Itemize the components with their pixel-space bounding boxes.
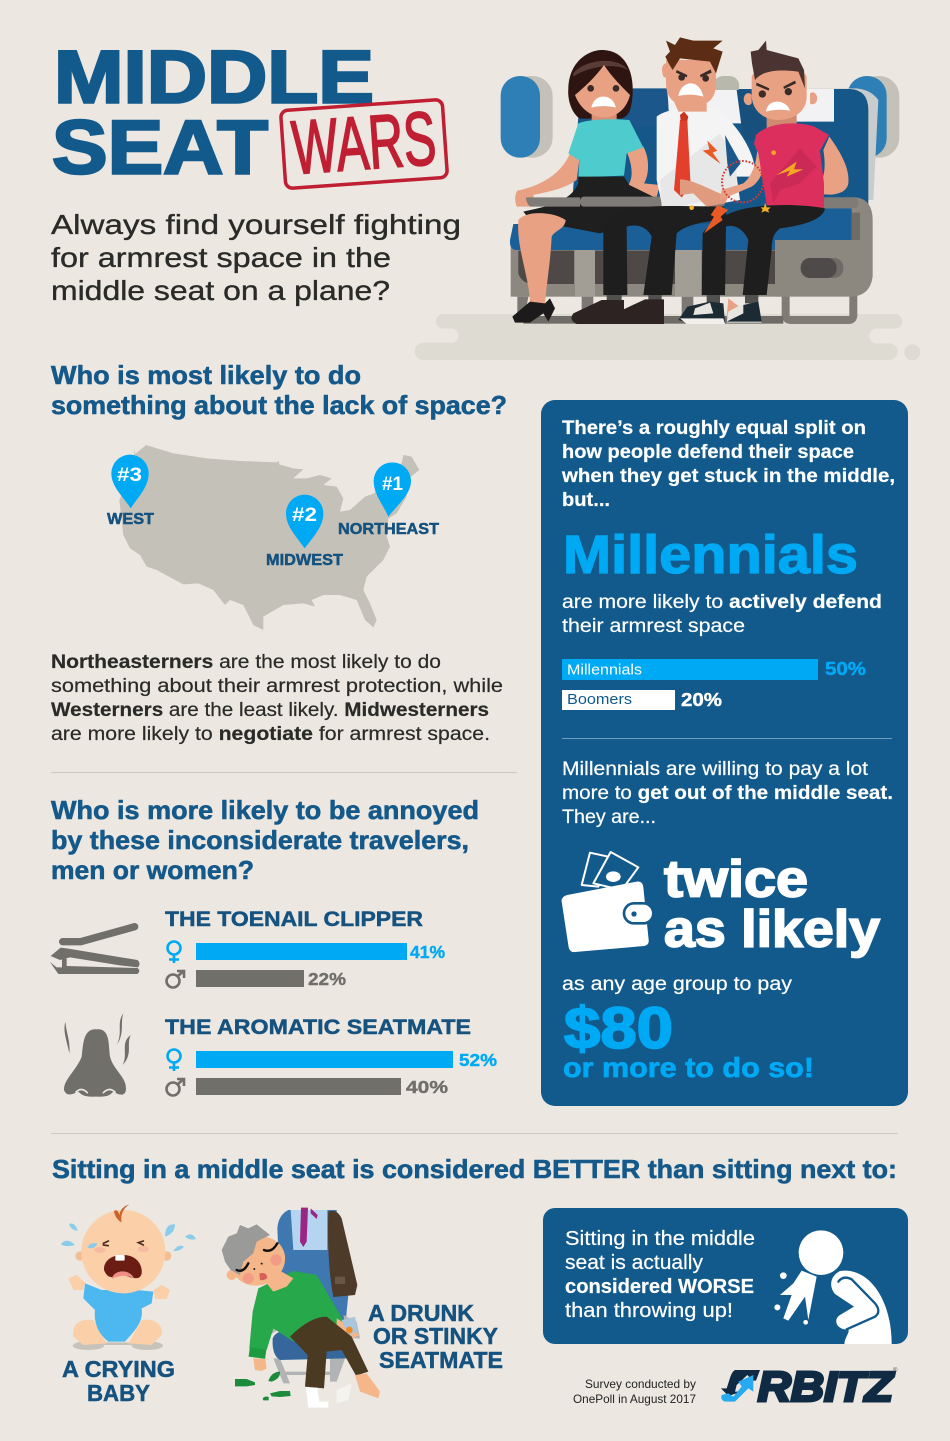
panel intro text: when they get stuck in the middle, [561, 466, 895, 487]
label: drunk or stinky seatmate: OR STINKY [373, 1323, 498, 1349]
paragraph: regional findings: Northeasterners are the most likely to do [51, 652, 441, 673]
stamp: wars [280, 95, 448, 192]
panel intro text [561, 418, 895, 511]
$80: $80 [564, 996, 673, 1061]
bar: boomers 20% [562, 690, 722, 710]
bar: millennials 50% [562, 659, 866, 680]
heading: annoyed [51, 795, 479, 885]
region labels: MIDWEST [266, 552, 344, 569]
panel intro text: There’s a roughly equal split on [562, 418, 866, 439]
willing to pay text: Millennials are willing to pay a lot [562, 759, 869, 780]
illustration: drunk seatmate [222, 1208, 380, 1408]
defend text [562, 592, 882, 637]
paragraph: regional findings: Westerners are the least likely. Midwesterners [51, 700, 489, 721]
subtitle: for armrest space in the [51, 242, 391, 273]
panel: worse than throwing up [543, 1208, 908, 1344]
male bar: 22% [308, 969, 346, 989]
or more: or more to do so! [563, 1052, 814, 1083]
panel intro text: how people defend their space [562, 442, 854, 463]
willing to pay text [562, 759, 893, 828]
heading: annoyed: by these inconsiderate travelers, [51, 825, 469, 855]
heading: who acts: Who is most likely to do [51, 360, 361, 390]
twice as likely: as likely [664, 900, 880, 958]
icon: wallet [562, 852, 653, 952]
heading: annoyed: men or women? [51, 855, 254, 885]
chart: aromatic seatmate [165, 1016, 497, 1097]
male bar: 40% [406, 1077, 449, 1097]
panel: millennials [541, 400, 908, 1106]
male bar [166, 969, 346, 989]
icon: person vomiting [774, 1230, 892, 1344]
defend text: their armrest space [562, 616, 745, 637]
bar: millennials 50%: 50% [825, 659, 866, 679]
logo: Orbitz: ORBITZ [722, 1363, 894, 1410]
twice as likely [664, 850, 880, 958]
paragraph: regional findings: something about their armrest protection, while [51, 676, 503, 697]
pin #1: #1 [382, 474, 403, 495]
seat cushions [510, 208, 852, 250]
panel intro text: but... [562, 490, 610, 511]
chart: toenail clipper [165, 908, 445, 989]
bar: millennials 50%: Millennials [567, 662, 642, 678]
icon: nail clipper [50, 927, 140, 974]
map of US regions [107, 445, 440, 630]
twice as likely: twice [664, 850, 808, 908]
male bar [166, 1077, 449, 1097]
heading: who acts: something about the lack of space? [51, 390, 507, 420]
paragraph: regional findings: are more likely to negotiate for armrest space. [51, 724, 490, 745]
female bar: 52% [459, 1050, 497, 1070]
subtitle [51, 209, 461, 306]
left window [501, 76, 553, 158]
label: drunk or stinky seatmate: A DRUNK [368, 1300, 474, 1326]
stamp: wars: WARS [289, 96, 439, 191]
panel text: considered WORSE [565, 1276, 754, 1298]
panel text: Sitting in the middle [565, 1228, 755, 1250]
region labels: NORTHEAST [338, 521, 440, 538]
ground cloud [415, 314, 902, 360]
pin #3: #3 [117, 465, 142, 486]
trousers with separate legs [702, 205, 825, 295]
millennials headline: Millennials [563, 525, 858, 585]
panel text [565, 1228, 755, 1322]
label: drunk or stinky seatmate [368, 1300, 503, 1373]
label: a crying baby: A CRYING [62, 1356, 175, 1382]
defend text: are more likely to actively defend [562, 592, 882, 613]
panel text: than throwing up! [565, 1300, 733, 1322]
age group text: as any age group to pay [562, 974, 793, 995]
title: MIDDLE [54, 36, 374, 118]
pin #3 [111, 455, 149, 508]
trousers with separate legs [603, 206, 728, 295]
heading: who acts [51, 360, 507, 420]
right window [847, 76, 899, 158]
title [52, 36, 374, 190]
survey credit [573, 1377, 696, 1406]
willing to pay text: They are... [562, 807, 656, 828]
icon: nose with smell [64, 1013, 131, 1097]
map shape [119, 445, 419, 630]
female bar [168, 942, 445, 963]
bar: boomers 20%: Boomers [567, 691, 632, 708]
chart: aromatic seatmate: THE AROMATIC SEATMATE [165, 1016, 471, 1039]
paragraph: regional findings [51, 652, 503, 745]
chart: toenail clipper: THE TOENAIL CLIPPER [165, 908, 423, 931]
illustration: crying baby [61, 1204, 196, 1350]
illustration: three passengers on plane seats [415, 37, 920, 360]
subtitle: Always find yourself fighting [51, 209, 461, 240]
passenger: woman [512, 50, 663, 323]
label: a crying baby [62, 1356, 175, 1406]
seat backs [570, 76, 878, 233]
label: drunk or stinky seatmate: SEATMATE [379, 1347, 503, 1373]
armrests [526, 197, 858, 208]
pin #1 [374, 462, 411, 517]
bar: boomers 20%: 20% [681, 690, 722, 710]
panel text: seat is actually [565, 1252, 703, 1274]
seat base and side panel [511, 197, 873, 324]
passenger: man in pink shirt [678, 41, 849, 324]
survey credit: OnePoll in August 2017 [573, 1392, 696, 1406]
pin #2 [286, 495, 323, 548]
survey credit: Survey conducted by [585, 1377, 696, 1391]
region labels [107, 511, 440, 569]
willing to pay text: more to get out of the middle seat. [562, 783, 893, 804]
title: SEAT [52, 106, 268, 190]
region labels: WEST [107, 511, 155, 528]
logo: Orbitz: ® [893, 1367, 898, 1374]
female bar: 41% [410, 942, 445, 962]
subtitle: middle seat on a plane? [51, 275, 390, 306]
passenger: man in tie [571, 37, 758, 324]
heading: annoyed: Who is more likely to be annoyed [51, 795, 479, 825]
heading: better than: Sitting in a middle seat is considered BETTER than sitting next to: [52, 1154, 897, 1184]
pin #2: #2 [292, 505, 317, 526]
label: a crying baby: BABY [87, 1380, 150, 1406]
female bar [168, 1050, 497, 1071]
